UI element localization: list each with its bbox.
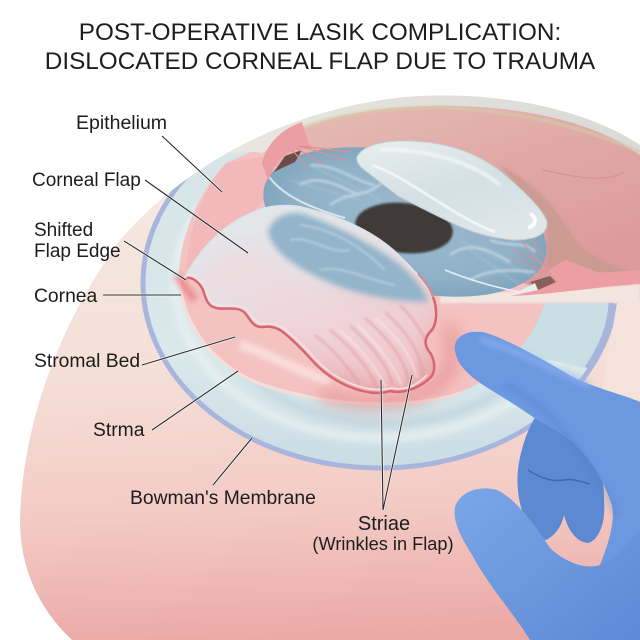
pupil xyxy=(354,201,454,255)
title: DISLOCATED CORNEAL FLAP DUE TO TRAUMA xyxy=(45,48,596,75)
gloved hand xyxy=(454,332,640,640)
thumb and palm xyxy=(454,488,640,640)
left ligament xyxy=(262,122,350,180)
index finger xyxy=(455,332,640,565)
iris xyxy=(263,147,547,297)
title: POST-OPERATIVE LASIK COMPLICATION: xyxy=(79,19,561,46)
label: cornea: Cornea xyxy=(34,286,98,307)
light band and ring segment right of iris xyxy=(440,284,640,400)
label: shifted flap edge xyxy=(34,220,121,262)
upper chamber xyxy=(262,106,640,290)
back fingers xyxy=(517,400,604,543)
leader line halos xyxy=(103,136,412,510)
stromal bed xyxy=(176,130,640,404)
corneal flap xyxy=(185,206,436,393)
iris seen through flap xyxy=(268,213,428,302)
label: stromal bed: Stromal Bed xyxy=(34,351,140,372)
label: shifted flap edge: Shifted xyxy=(34,220,93,241)
label: striae: Striae xyxy=(358,513,410,535)
label: striae xyxy=(312,513,454,554)
label: epithelium: Epithelium xyxy=(76,112,167,134)
label: stroma: Strma xyxy=(93,420,145,441)
corneal ring xyxy=(143,98,617,468)
title xyxy=(45,19,596,75)
label: corneal flap: Corneal Flap xyxy=(32,170,141,191)
right ligament xyxy=(510,238,640,296)
displaced lens dome xyxy=(357,141,547,240)
leader line strokes xyxy=(103,136,412,510)
upper rim of globe xyxy=(227,96,640,155)
label: shifted flap edge: Flap Edge xyxy=(34,241,121,262)
label: striae: (Wrinkles in Flap) xyxy=(312,534,454,554)
label: bowman's membrane: Bowman's Membrane xyxy=(130,488,316,509)
